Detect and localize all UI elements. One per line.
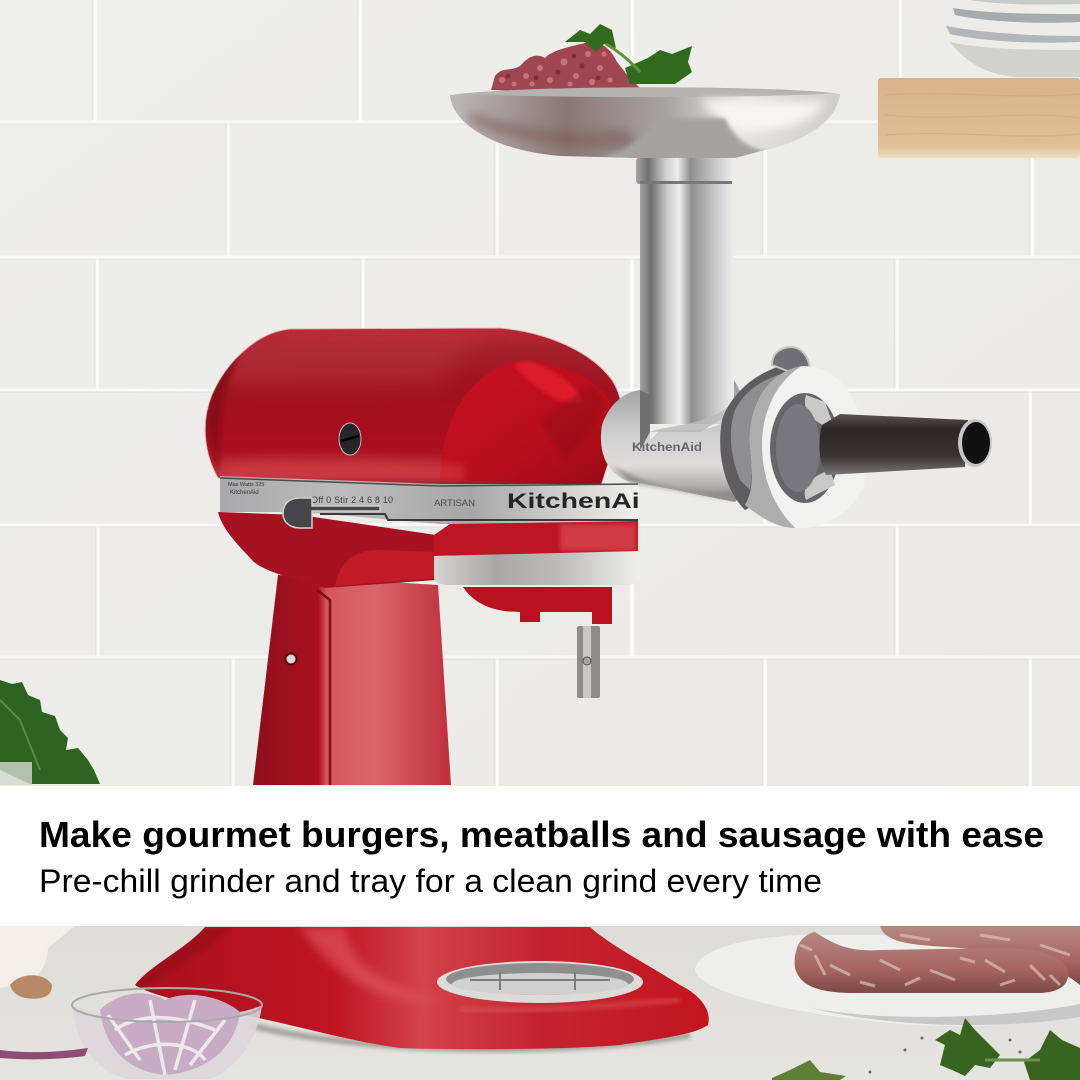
tiled kitchen wall background xyxy=(0,0,1080,790)
glass bowl of red onion xyxy=(72,988,262,1079)
caption headline: Make gourmet burgers, meatballs and sausage with ease xyxy=(39,814,1044,855)
wooden shelf xyxy=(878,78,1080,158)
base chrome ring xyxy=(437,961,643,1003)
parsley sprig left xyxy=(0,680,100,785)
grinder collar xyxy=(636,158,735,184)
beater shaft xyxy=(577,626,600,698)
grinder feed tube xyxy=(640,184,734,424)
silver ring under head xyxy=(434,551,640,585)
grinder end ring collar xyxy=(720,365,800,510)
black sausage nozzle xyxy=(819,414,992,475)
band labels: Max Watts 325 xyxy=(228,482,264,488)
garlic bulb xyxy=(0,926,75,999)
neck highlight xyxy=(335,550,435,586)
speed lever xyxy=(283,498,380,528)
chrome trim band: Off 0 Stir 2 4 6 8 10 xyxy=(311,495,393,505)
speed lock screw xyxy=(339,423,361,455)
mixer base xyxy=(135,927,709,1049)
white plate xyxy=(695,935,1080,1026)
parsley leaf bottom centre xyxy=(772,1060,846,1080)
chrome trim band xyxy=(220,476,657,528)
mixer neck xyxy=(218,512,436,588)
ground meat on tray xyxy=(491,42,640,92)
chrome trim band: ARTISAN xyxy=(434,498,475,509)
grinder elbow body xyxy=(601,380,768,502)
countertop xyxy=(0,926,1080,1080)
red collar under band xyxy=(434,521,638,556)
parsley garnish xyxy=(565,24,692,84)
caption subheading: Pre-chill grinder and tray for a clean grind every time xyxy=(39,863,822,899)
sausages xyxy=(795,926,1080,993)
onion strip xyxy=(0,1048,88,1059)
grinder ring knob xyxy=(772,347,810,372)
chrome trim band: KitchenAid xyxy=(507,490,657,513)
base shadow xyxy=(250,1025,690,1049)
embossed logo on grinder: KitchenAid xyxy=(632,440,702,454)
caption banner xyxy=(0,786,1080,926)
beater hub xyxy=(463,587,612,624)
chrome trim band: KitchenAid xyxy=(230,490,259,496)
mixer head xyxy=(205,328,622,488)
mixer column xyxy=(253,575,451,785)
stacked plates on shelf xyxy=(946,0,1080,77)
grinder front ring xyxy=(745,366,865,528)
parsley bottom right xyxy=(868,1018,1080,1080)
meat tray xyxy=(450,87,840,165)
